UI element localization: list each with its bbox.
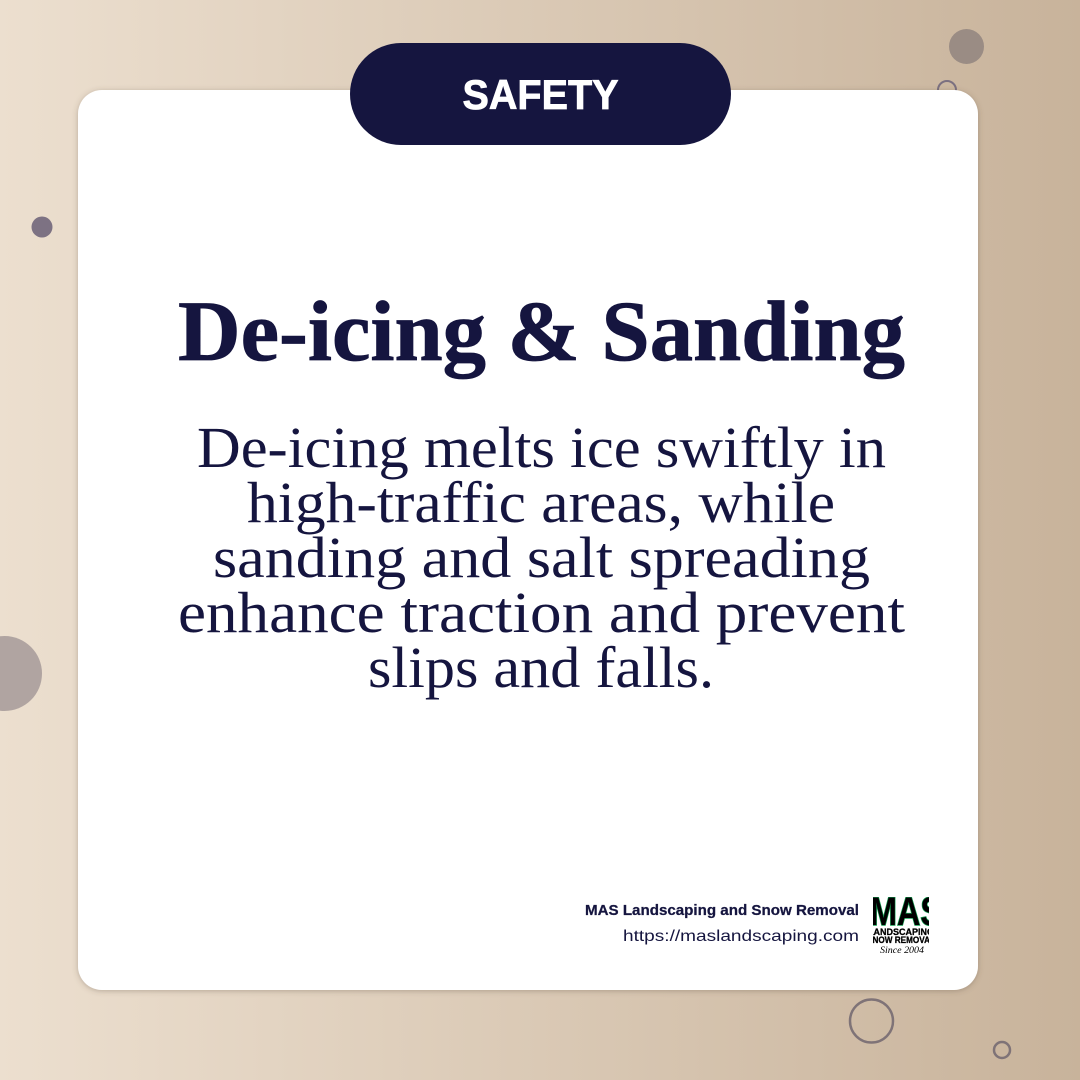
title: De-icing & Sanding xyxy=(178,283,905,379)
body text: slips and falls. xyxy=(368,635,714,700)
logo line 1: LANDSCAPING xyxy=(868,927,934,938)
category badge xyxy=(350,43,731,145)
body text xyxy=(178,415,905,700)
panel: white card xyxy=(78,90,978,990)
body text: De-icing melts ice swiftly in xyxy=(197,415,886,480)
body text: enhance traction and prevent xyxy=(178,580,905,645)
logo since: Since 2004 xyxy=(880,945,925,955)
body text: sanding and salt spreading xyxy=(213,525,870,590)
footer url: https://maslandscaping.com xyxy=(623,928,859,945)
badge label: SAFETY xyxy=(462,71,618,118)
logo line 2: SNOW REMOVAL xyxy=(867,935,935,945)
logo xyxy=(867,890,942,955)
body text: high-traffic areas, while xyxy=(247,470,835,535)
footer company name: MAS Landscaping and Snow Removal xyxy=(585,903,859,919)
